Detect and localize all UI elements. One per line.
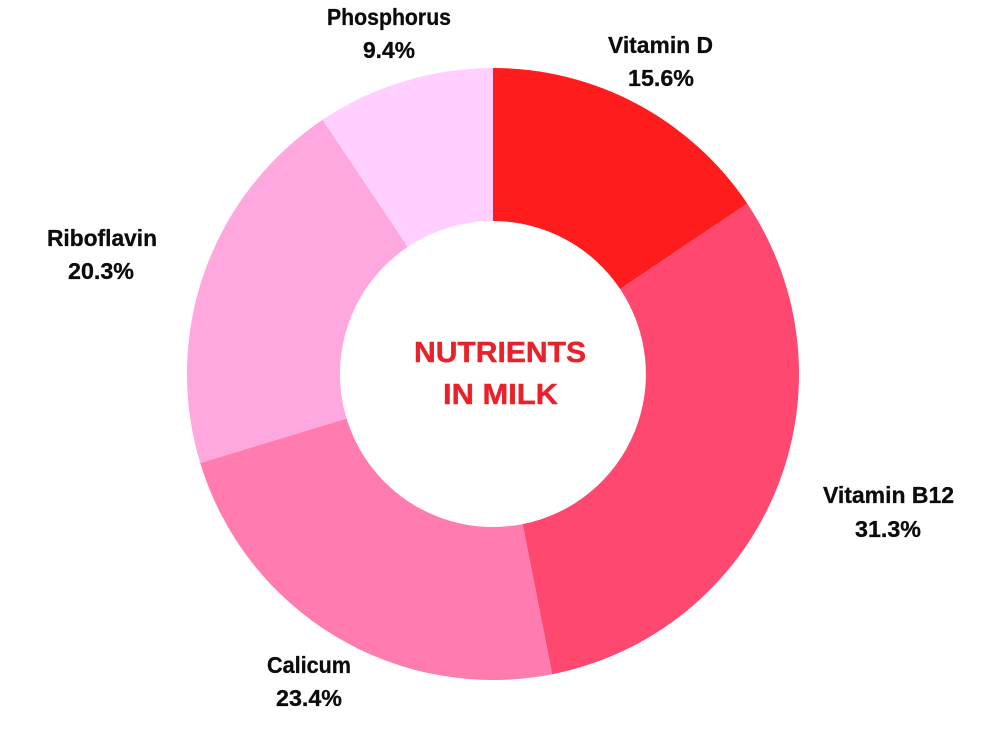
label: Riboflavin: Riboflavin xyxy=(47,225,157,251)
label: Phosphorus xyxy=(327,4,451,63)
donut chart xyxy=(187,68,799,680)
segment: Calicum xyxy=(200,418,552,680)
label: Vitamin B12: Vitamin B12 xyxy=(823,482,954,508)
label: Riboflavin: 20.3% xyxy=(68,258,134,284)
label: Phosphorus: 9.4% xyxy=(363,37,415,63)
label: Phosphorus: Phosphorus xyxy=(327,4,451,30)
label: Calicum xyxy=(267,652,351,711)
label: Vitamin B12: 31.3% xyxy=(855,516,921,542)
segment: Vitamin B12 xyxy=(523,204,799,674)
label: Vitamin D xyxy=(608,32,713,91)
segment: Riboflavin xyxy=(187,120,408,463)
label: Vitamin B12 xyxy=(823,482,954,542)
segment: Phosphorus xyxy=(323,68,493,247)
center title: NUTRIENTS xyxy=(414,337,586,369)
label: Calicum: Calicum xyxy=(267,652,351,678)
center title xyxy=(414,337,586,411)
segment: Vitamin D xyxy=(493,68,747,289)
label: Vitamin D: 15.6% xyxy=(628,65,694,91)
label: Riboflavin xyxy=(47,225,157,284)
label: Vitamin D: Vitamin D xyxy=(608,32,713,58)
label: Calicum: 23.4% xyxy=(276,685,342,711)
center title: IN MILK xyxy=(443,379,558,411)
